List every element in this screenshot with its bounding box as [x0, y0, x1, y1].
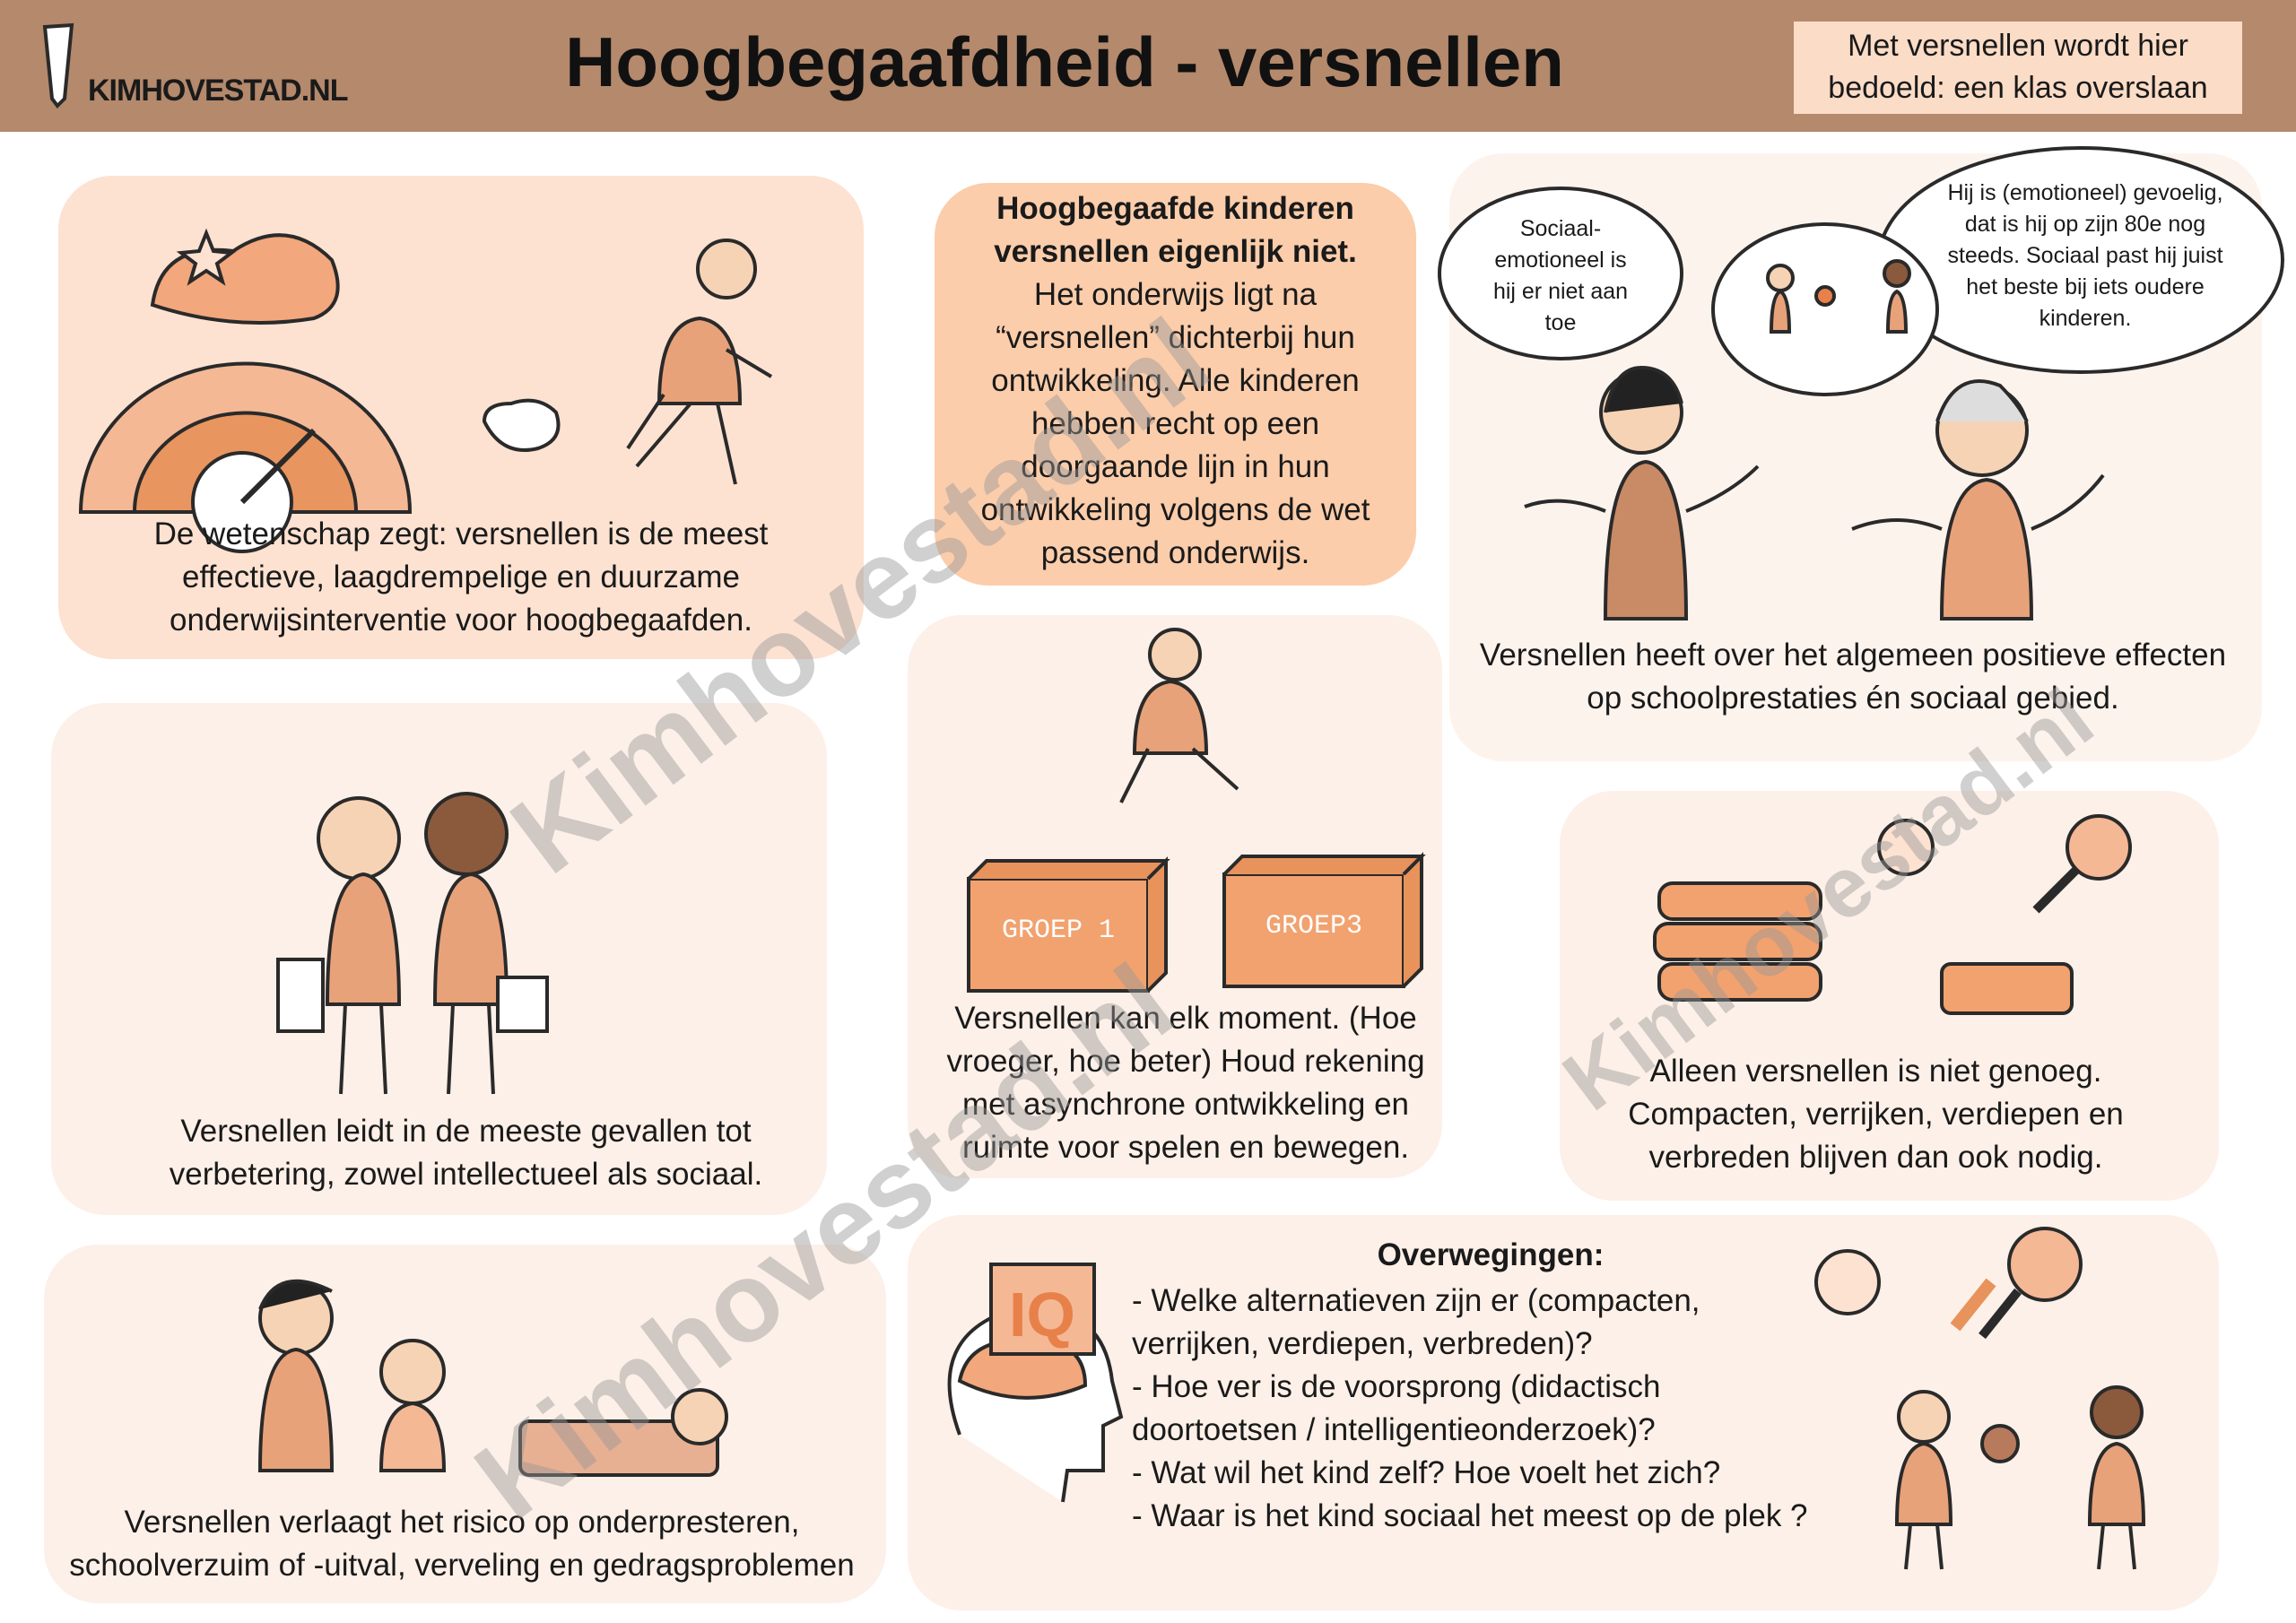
text: improvement: Versnellen leidt in de meeste gevallen tot	[180, 1114, 752, 1149]
text: not enough: Compacten, verrijken, verdiepen en	[1628, 1097, 2124, 1132]
figure: grandmother	[1852, 381, 2103, 619]
icon: brain with stars	[152, 233, 338, 323]
icon: head with IQ: IQ	[1009, 1280, 1075, 1350]
figures: kids with ball	[1897, 1387, 2144, 1569]
box: groep 1: GROEP 1	[1002, 916, 1115, 946]
watermark 2: Kimhovestad.nl	[454, 941, 1196, 1543]
icon: logo pencil	[45, 25, 72, 106]
text: any moment	[946, 1001, 1425, 1165]
callout: definition	[1794, 22, 2242, 114]
text: bubble left: emotioneel is	[1494, 247, 1627, 273]
text: bubble left: hij er niet aan	[1493, 279, 1628, 304]
text: gifted children: doorgaande lijn in hun	[1021, 449, 1330, 484]
watermark 1: Kimhovestad.nl	[490, 295, 1231, 898]
callout: definition: bedoeld: een klas overslaan	[1828, 71, 2208, 105]
list: considerations: - Hoe ver is de voorsprong (didactisch	[1132, 1369, 1660, 1404]
text: positive effects	[1480, 638, 2226, 716]
figures: upset kids	[260, 1281, 726, 1475]
icon: books	[1655, 816, 2130, 1013]
text: bubble left	[1493, 216, 1628, 335]
box: groep 3	[1224, 856, 1422, 986]
text: risk: Versnellen verlaagt het risico op onderpresteren,	[125, 1505, 799, 1540]
list: considerations: verrijken, verdiepen, verbreden)?	[1132, 1326, 1593, 1361]
icon: jumping girl	[1121, 629, 1238, 803]
text: bubble right	[1947, 180, 2223, 331]
heading: considerations: Overwegingen:	[1378, 1237, 1604, 1272]
text: bubble right: kinderen.	[2039, 306, 2131, 331]
text: improvement	[169, 1114, 762, 1192]
text: any moment: vroeger, hoe beter) Houd rekening	[946, 1044, 1425, 1079]
header bar	[0, 0, 2296, 132]
text: bubble left: Sociaal-	[1520, 216, 1601, 241]
figures: two kids	[278, 794, 547, 1094]
box: groep 1	[969, 861, 1166, 991]
speech bubbles	[1439, 148, 2283, 395]
panel: positive effects	[1449, 153, 2262, 761]
panel: considerations	[908, 1215, 2219, 1610]
text: gifted children: Het onderwijs ligt na	[1034, 277, 1317, 312]
icon: running girl	[628, 240, 771, 484]
text: positive effects: op schoolprestaties én sociaal gebied.	[1587, 681, 2119, 716]
list: considerations	[1132, 1283, 1808, 1533]
title: Hoogbegaafdheid - versnellen	[565, 22, 1564, 101]
text: gifted children: ontwikkeling volgens de wet	[981, 492, 1370, 527]
text: any moment: ruimte voor spelen en bewegen.	[962, 1130, 1409, 1165]
text: not enough	[1628, 1054, 2124, 1175]
text: improvement: verbetering, zowel intellectueel als sociaal.	[170, 1157, 762, 1192]
callout: definition: Met versnellen wordt hier	[1848, 29, 2188, 63]
text: not enough: verbreden blijven dan ook nodig.	[1649, 1140, 2102, 1175]
text: bubble left: toe	[1545, 310, 1576, 335]
panel: any moment	[908, 615, 1442, 1178]
text: science	[154, 516, 768, 638]
panel: gifted children	[935, 183, 1416, 586]
panel: science	[58, 176, 864, 659]
text: science: onderwijsinterventie voor hoogbegaafden.	[170, 603, 752, 638]
list: considerations: doortoetsen / intelligentieonderzoek)?	[1132, 1412, 1656, 1447]
text: gifted children: “versnellen” dichterbij hun	[996, 320, 1355, 355]
icon: puff	[484, 401, 558, 450]
text: bubble right: dat is hij op zijn 80e nog	[1965, 212, 2205, 237]
text: gifted children: passend onderwijs.	[1041, 535, 1309, 570]
text: bubble right: Hij is (emotioneel) gevoelig,	[1947, 180, 2223, 205]
text: any moment: met asynchrone ontwikkeling en	[962, 1087, 1409, 1122]
figure: teacher	[1525, 368, 1758, 619]
box: groep 3: GROEP3	[1265, 911, 1362, 942]
icon: head with IQ	[950, 1264, 1121, 1502]
text: not enough: Alleen versnellen is niet genoeg.	[1650, 1054, 2101, 1089]
text: gifted children: Hoogbegaafde kinderen	[996, 191, 1354, 226]
text: gifted children: hebben recht op een	[1031, 406, 1319, 441]
text: science: De wetenschap zegt: versnellen is de meest	[154, 516, 768, 551]
list: considerations: - Wat wil het kind zelf? Hoe voelt het zich?	[1132, 1455, 1720, 1490]
icons: bulb pencil magnifier	[1816, 1228, 2081, 1336]
list: considerations: - Waar is het kind sociaal het meest op de plek ?	[1132, 1498, 1808, 1533]
text: risk	[69, 1505, 855, 1583]
text: science: effectieve, laagdrempelige en duurzame	[182, 560, 740, 595]
text: gifted children	[981, 191, 1370, 570]
icon: speedometer	[81, 364, 410, 551]
watermark 3: Kimhovestad.nl	[1546, 672, 2110, 1129]
list: considerations: - Welke alternatieven zijn er (compacten,	[1132, 1283, 1700, 1318]
text: any moment: Versnellen kan elk moment. (Hoe	[954, 1001, 1417, 1036]
text: positive effects: Versnellen heeft over het algemeen positieve effecten	[1480, 638, 2226, 673]
text: gifted children: versnellen eigenlijk niet.	[994, 234, 1357, 269]
panel: risk	[44, 1245, 886, 1603]
text: gifted children: ontwikkeling. Alle kinderen	[991, 363, 1360, 398]
panel: improvement	[51, 703, 827, 1215]
text: risk: schoolverzuim of -uitval, verveling en gedragsproblemen	[69, 1548, 855, 1583]
panel: not enough	[1560, 791, 2219, 1201]
logo text: KIMHOVESTAD.NL	[88, 74, 347, 108]
text: bubble right: het beste bij iets oudere	[1966, 274, 2205, 299]
text: bubble right: steeds. Sociaal past hij juist	[1947, 243, 2223, 268]
